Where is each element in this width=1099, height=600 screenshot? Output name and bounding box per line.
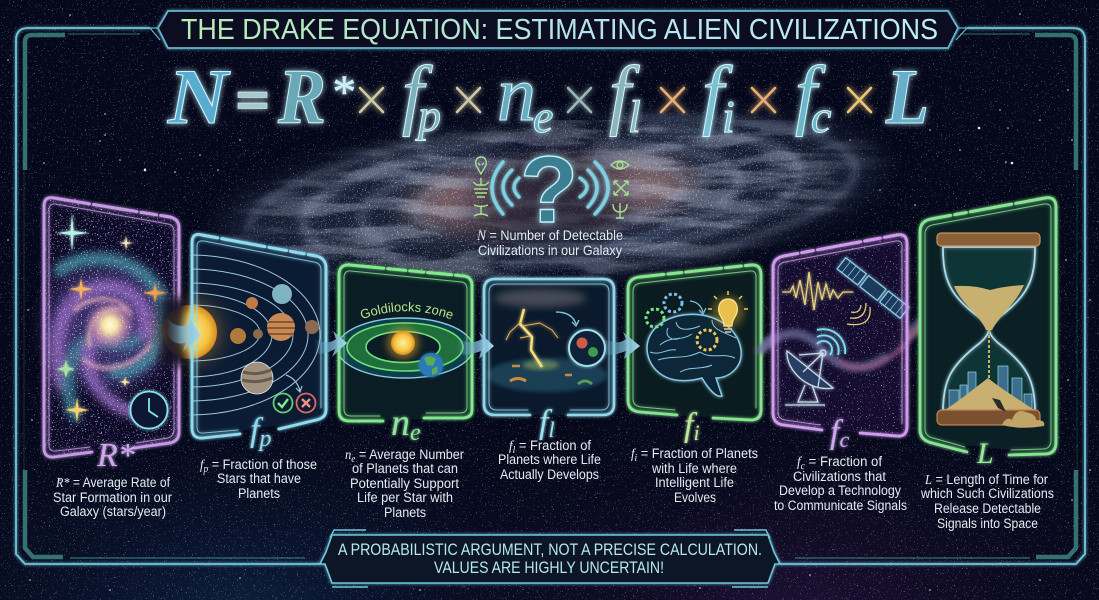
label: fi: i xyxy=(693,420,700,445)
caption: ne: e xyxy=(351,454,356,465)
drake equation formula: f xyxy=(402,50,433,137)
nebula stream over panel xyxy=(760,334,905,368)
icon: lightning xyxy=(506,309,558,367)
icon: sparkling stars xyxy=(57,213,167,422)
caption: L: Signals into Space xyxy=(937,516,1038,531)
label: fl: f xyxy=(539,404,548,441)
signal waves xyxy=(492,162,608,214)
icon: check and cross xyxy=(274,375,316,412)
caption: ne: Planets xyxy=(384,505,426,520)
caption: fi: f xyxy=(631,446,637,461)
caption: ne: n xyxy=(345,447,352,462)
panel: fl life develops xyxy=(484,279,614,442)
caption: fc: to Communicate Signals xyxy=(774,498,907,513)
caption: fl: f xyxy=(509,438,515,453)
arrow: fl to fi xyxy=(602,332,640,359)
drake equation formula xyxy=(167,50,929,142)
icon: sun xyxy=(160,298,220,366)
rubble xyxy=(1002,411,1044,428)
icon: dish arcs xyxy=(817,329,845,355)
panel frame xyxy=(192,234,326,438)
icon: brain xyxy=(647,314,741,396)
drake equation formula: e xyxy=(533,91,553,142)
panel frame xyxy=(484,279,614,415)
caption: fp: f xyxy=(200,457,206,472)
label: R*: R* xyxy=(96,437,135,474)
caption: fc: f xyxy=(797,454,803,469)
label: fi: f xyxy=(684,407,693,444)
caption: R*: R* = Average Rate of xyxy=(55,475,170,490)
alien glyph icons xyxy=(473,157,629,218)
caption: L: L = Length of Time for xyxy=(924,472,1048,487)
water xyxy=(487,358,607,392)
panel: fi intelligent life xyxy=(628,264,761,445)
caption: ne: of Planets that can xyxy=(352,461,458,476)
drake equation formula: * xyxy=(330,66,354,119)
drake equation formula: n xyxy=(497,50,536,137)
question mark: ? xyxy=(520,137,578,243)
callout: bottom note xyxy=(320,530,780,587)
caption: fi: i xyxy=(635,453,637,464)
storm cloud xyxy=(494,289,586,307)
panel: fp planets xyxy=(150,230,330,454)
icon: hourglass xyxy=(937,233,1044,428)
label: fc: c xyxy=(839,427,849,452)
city xyxy=(949,366,1032,408)
drake equation formula: f xyxy=(609,50,640,137)
drake equation formula: p xyxy=(415,90,441,141)
caption: R*: Galaxy (stars/year) xyxy=(60,504,166,519)
drake equation formula: f xyxy=(702,50,733,137)
panel: ne Goldilocks xyxy=(335,261,476,446)
caption: L: Release Detectable xyxy=(934,501,1041,516)
panel frame xyxy=(44,198,179,457)
goldilocks label: Goldilocks zone xyxy=(360,302,453,319)
drake equation formula: f xyxy=(795,50,826,137)
icon: sun xyxy=(387,327,419,359)
caption: N: Civilizations in our Galaxy xyxy=(478,242,622,258)
drake equation formula: N xyxy=(167,53,231,140)
caption: fi: Intelligent Life xyxy=(655,475,734,490)
caption: fi: = Fraction of Planets xyxy=(637,446,758,461)
sand top xyxy=(954,285,1024,330)
caps xyxy=(937,233,1040,246)
caption: ne xyxy=(345,447,464,520)
caption: fl: = Fraction of xyxy=(515,438,591,453)
label: ne: e xyxy=(410,420,421,446)
icon: satellite arcs xyxy=(847,303,870,325)
caption: fl: Planets where Life xyxy=(498,452,601,467)
caption: fc: Develop a Technology xyxy=(779,483,901,498)
drake equation formula: i xyxy=(722,91,735,142)
caption: fc: c xyxy=(801,461,806,472)
sand pile xyxy=(945,378,1034,410)
panel: L lifetime xyxy=(920,196,1056,470)
caption: fc: Civilizations that xyxy=(793,469,886,484)
drake equation formula: c xyxy=(811,91,831,142)
panel frame xyxy=(628,265,761,420)
caption: ne: Life per Star with xyxy=(357,490,453,505)
caption: fc xyxy=(774,454,907,513)
callout text: A PROBABILISTIC ARGUMENT, NOT A PRECISE CALCULATION. xyxy=(338,541,762,559)
icon: lightbulb xyxy=(708,291,748,332)
caption: fp: Planets xyxy=(238,486,280,501)
caption: fp: = Fraction of those xyxy=(208,457,317,472)
icon: spiral galaxy xyxy=(44,197,179,458)
caption: R* xyxy=(53,475,172,519)
panel: fc communicating xyxy=(760,233,909,452)
goldilocks ring xyxy=(337,318,473,378)
icon: radio dish xyxy=(785,350,833,405)
caption: fi xyxy=(631,446,758,505)
icon: microbe circle xyxy=(556,312,605,366)
caption: fp: Stars that have xyxy=(217,471,301,486)
central N symbol: question mark with signal waves xyxy=(473,137,629,243)
label: ne: n xyxy=(391,402,410,444)
galaxy backdrop xyxy=(206,103,894,296)
label: fp: f xyxy=(250,412,259,449)
panel frame xyxy=(339,265,472,421)
callout: bottom note: VALUES ARE HIGHLY UNCERTAIN! xyxy=(434,559,664,577)
caption: fl: l xyxy=(513,445,515,456)
caption: R*: Star Formation in our xyxy=(53,490,172,505)
panel: R* star formation xyxy=(44,197,179,474)
caption: fc: = Fraction of xyxy=(805,454,882,469)
title banner xyxy=(150,11,967,48)
connector: cosmic signal stream xyxy=(750,303,955,371)
caption: L: which Such Civilizations xyxy=(920,486,1054,501)
icon: earth xyxy=(419,353,443,377)
icon: gears xyxy=(646,294,717,350)
sand stream xyxy=(988,330,990,378)
caption: fp xyxy=(200,457,317,501)
title text: THE DRAKE EQUATION: ESTIMATING ALIEN CIVILIZATIONS xyxy=(181,14,938,46)
drake equation formula: l xyxy=(628,91,641,142)
drake equation formula: R xyxy=(277,53,326,140)
caption: ne: Potentially Support xyxy=(350,476,459,491)
caption: ne: = Average Number xyxy=(355,447,464,462)
planets xyxy=(230,284,319,394)
caption: N xyxy=(476,227,623,258)
caption: fi: with Life where xyxy=(651,461,737,476)
caption: N: N = Number of Detectable xyxy=(476,227,623,244)
caption: fl xyxy=(498,438,601,482)
arrow: ne to fl xyxy=(456,332,494,359)
arrow: R* to fp xyxy=(166,314,201,351)
panel frame xyxy=(773,235,907,436)
label: fp: p xyxy=(257,426,271,452)
caption: fi: Evolves xyxy=(674,490,716,505)
panel frame xyxy=(920,198,1056,455)
caption: L xyxy=(920,472,1054,531)
label: fc: f xyxy=(830,414,839,451)
label: L: L xyxy=(976,437,994,470)
caption: fl: Actually Develops xyxy=(500,467,599,482)
icon: satellite xyxy=(837,258,909,318)
icon: signal wave xyxy=(782,272,853,310)
caption: fp: p xyxy=(203,464,208,475)
label: fl: l xyxy=(548,417,555,442)
drake equation formula: L xyxy=(885,53,929,140)
orbits xyxy=(193,254,320,416)
arrow: fp to ne xyxy=(314,331,347,357)
icon: clock xyxy=(130,392,168,428)
